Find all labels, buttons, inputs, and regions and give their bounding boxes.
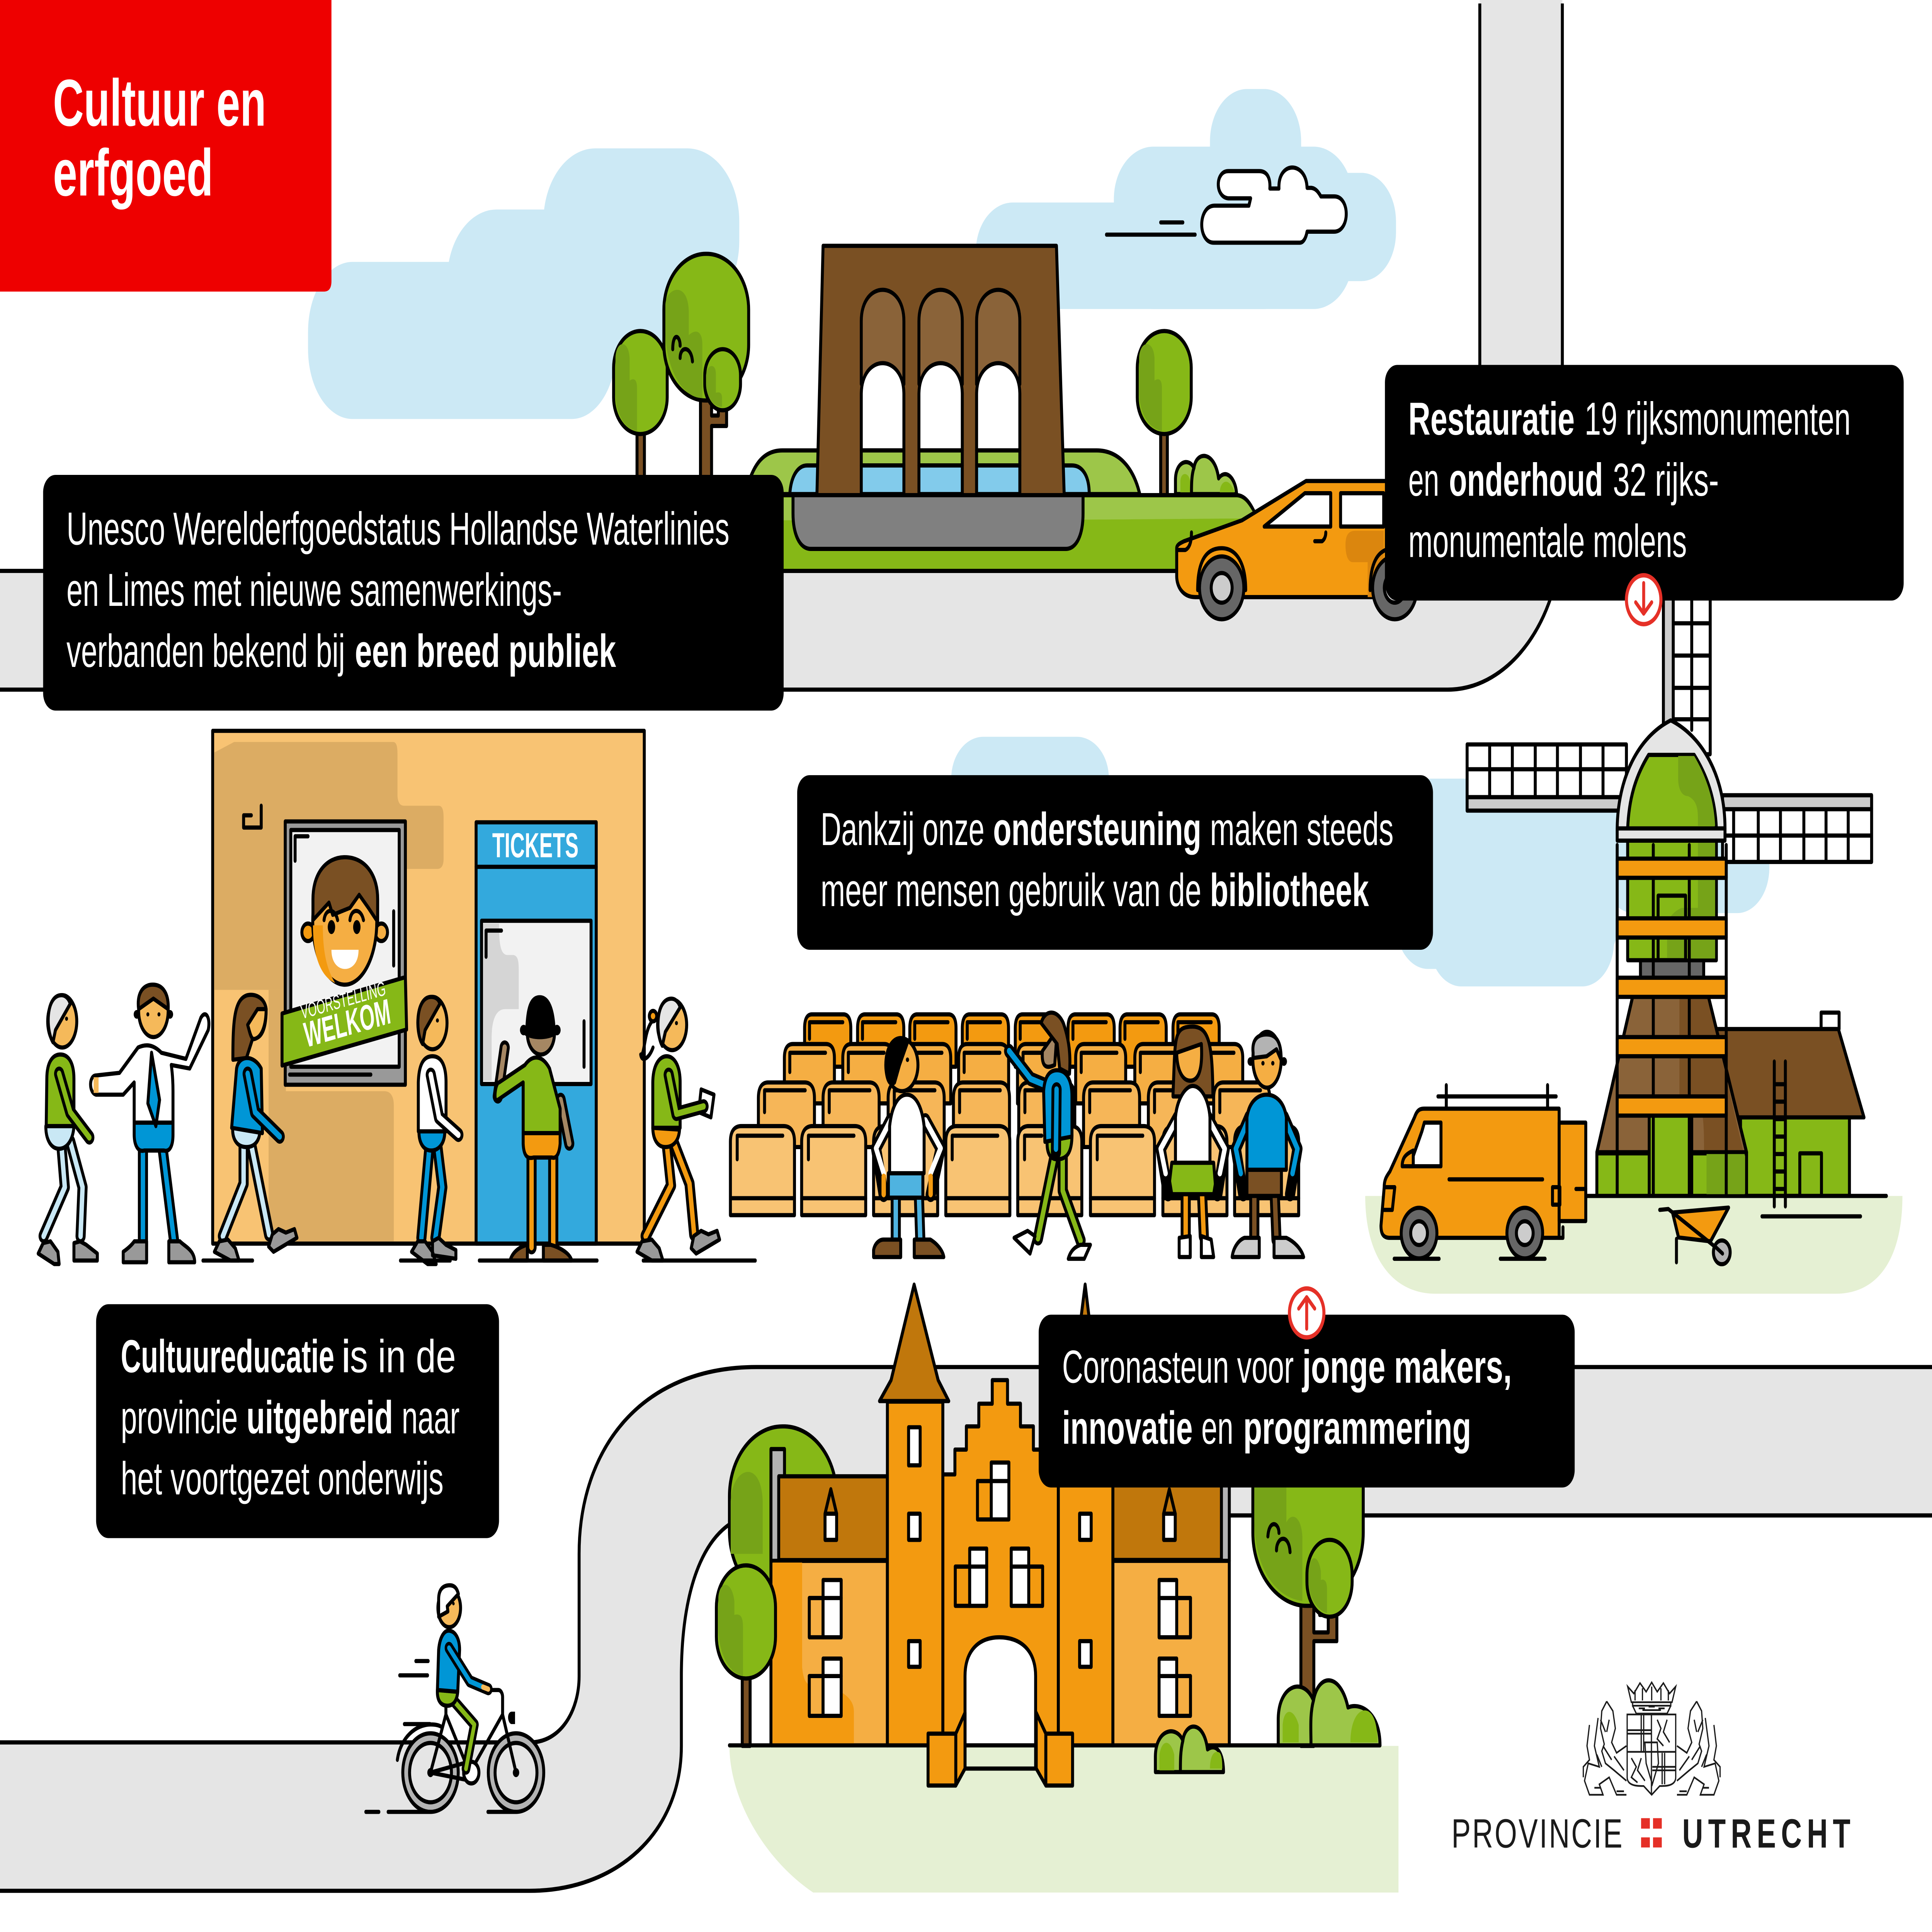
crown — [1628, 1682, 1676, 1714]
callout: Restauratie — [1385, 365, 1904, 600]
callout: Coronasteun: jonge makers, — [1302, 1341, 1512, 1393]
road outline: bottom road — [0, 1367, 1932, 1891]
callout: Unesco Werelderfgoedstatus — [43, 475, 784, 711]
trees beside the aqueduct — [614, 254, 1191, 496]
bush near road — [1175, 456, 1236, 494]
theatre seats: second row — [784, 1044, 1243, 1104]
callout: Unesco Werelderfgoedstatus: Unesco Werelderfgoedstatus Hollandse Waterlinies — [66, 503, 730, 554]
banner — [282, 977, 406, 1066]
road: bottom winding road — [0, 1367, 1932, 1891]
tower base brick — [1597, 997, 1747, 1152]
wordmark: provincie: PROVINCIE — [1451, 1811, 1622, 1856]
callout: Cultuureducatie: het voortgezet onderwijs — [121, 1452, 444, 1504]
poster: voorstelling welkom — [282, 821, 406, 1085]
foreground green bank — [739, 495, 1258, 571]
callout: Cultuureducatie: uitgebreid — [247, 1391, 393, 1443]
castle windows — [809, 1463, 1190, 1716]
person: woman with ponytail walking with paper — [637, 998, 719, 1260]
bicycle frame — [397, 1690, 516, 1781]
water — [790, 466, 1089, 494]
person: woman in blue pointing — [1009, 1013, 1090, 1259]
callout: bibliotheek: maken steeds — [1210, 803, 1394, 855]
cyclist — [437, 1585, 488, 1769]
castle ground line — [730, 1745, 1380, 1746]
person: seated woman with long hair — [1161, 1027, 1225, 1257]
green upper body — [1628, 840, 1716, 960]
central stepped gable — [943, 1380, 1058, 1745]
right sail — [1723, 795, 1872, 862]
callout: Restauratie: 32 rijks- — [1613, 454, 1719, 506]
title — [53, 66, 266, 210]
person: seated man in white shirt — [874, 1038, 944, 1257]
left wing — [771, 1449, 888, 1745]
ground: castle meadow — [730, 1746, 1398, 1893]
logo: Provincie Utrecht — [1451, 1682, 1850, 1856]
person on bicycle — [366, 1585, 544, 1812]
callout: Unesco Werelderfgoedstatus: verbanden bekend bij — [66, 625, 345, 677]
wheelbarrow — [1660, 1208, 1730, 1264]
tree behind castle left — [730, 1426, 837, 1601]
road: top road with vertical branch — [0, 0, 1562, 690]
rear green bank — [745, 451, 1140, 494]
callout: bibliotheek: bibliotheek — [1210, 864, 1369, 916]
logo red squares — [1641, 1818, 1662, 1847]
ground: windmill meadow — [1365, 1196, 1902, 1294]
ticket window — [481, 921, 591, 1084]
callout: Restauratie: 19 rijksmonumenten — [1585, 393, 1851, 444]
icon: red up arrow — [1289, 1289, 1324, 1337]
person: white-haired man in green walking — [38, 995, 97, 1264]
right lion — [1677, 1701, 1720, 1795]
upper sail — [1663, 594, 1710, 754]
person: woman in blue walking — [214, 995, 297, 1260]
title block — [0, 0, 332, 292]
castle with trees — [716, 1285, 1380, 1786]
theatre seats: third row — [759, 1082, 1270, 1147]
small outlined cloud — [1107, 168, 1346, 243]
left sail — [1467, 745, 1626, 811]
grey base — [1641, 960, 1704, 981]
callout: Restauratie: Restauratie — [1408, 393, 1575, 444]
tickets label: TICKETS — [492, 825, 578, 865]
castle archway and gate posts — [928, 1637, 1073, 1786]
clouds: sky background — [308, 89, 1769, 986]
small bush in front of castle — [1155, 1726, 1223, 1772]
callout: Restauratie: monumentale molens — [1408, 515, 1687, 567]
callout: bibliotheek — [797, 775, 1433, 950]
ticket booth — [476, 822, 596, 1243]
tree in front of castle — [716, 1565, 776, 1746]
right tower — [1058, 1285, 1113, 1745]
van: orange work van — [1381, 1085, 1586, 1259]
callout: bibliotheek: Dankzij onze — [821, 803, 985, 855]
person: seated man in blue with grey hair — [1232, 1032, 1304, 1257]
windmill with scaffolding — [1467, 594, 1886, 1216]
icon: red down arrow — [1626, 575, 1661, 624]
road outline: top road — [0, 3, 1562, 690]
callout: Cultuureducatie — [96, 1304, 499, 1538]
callout: Restauratie: en — [1408, 454, 1439, 506]
title: Cultuur en — [53, 66, 266, 140]
callout: Unesco Werelderfgoedstatus: een breed publiek — [355, 625, 616, 677]
person: man in white shirt and tie pointing — [90, 985, 209, 1262]
callout: Cultuureducatie: provincie — [121, 1391, 238, 1443]
coat of arms — [1583, 1682, 1720, 1795]
wordmark: utrecht: UTRECHT — [1682, 1811, 1850, 1856]
left tower with spire — [879, 1285, 949, 1745]
callout: Cultuureducatie: s in de — [350, 1330, 456, 1382]
mill cap — [1617, 720, 1725, 828]
shield — [1627, 1714, 1676, 1795]
theatre building wall — [213, 731, 644, 1243]
grey basin — [793, 495, 1083, 549]
right wing — [1113, 1475, 1229, 1745]
callout: bibliotheek: ondersteuning — [993, 803, 1201, 855]
farm house — [1585, 1013, 1886, 1216]
bicycle rear wheel — [403, 1733, 458, 1812]
callout: Coronasteun: en — [1201, 1402, 1233, 1454]
left lion — [1583, 1701, 1626, 1795]
callout: Coronasteun: innovatie — [1062, 1402, 1193, 1454]
theatre seats: front row — [730, 1126, 1299, 1215]
large bush right of castle — [1278, 1680, 1380, 1745]
callout: bibliotheek: meer mensen gebruik van de — [821, 864, 1201, 916]
callout: Unesco Werelderfgoedstatus: en Limes met nieuwe samenwerkings- — [66, 564, 562, 616]
callout: Coronasteun: programmering — [1243, 1402, 1471, 1454]
monument body with arches — [817, 246, 1064, 495]
tree behind castle right — [1253, 1397, 1363, 1746]
title: erfgoed — [53, 136, 213, 210]
scaffolding poles and planks — [1617, 845, 1726, 1196]
person: customer at ticket window — [495, 995, 572, 1260]
person: man in white shirt walking — [412, 997, 458, 1264]
poster face — [302, 857, 388, 985]
callout: Cultuureducatie: naar — [402, 1391, 459, 1443]
callout: Coronasteun: Coronasteun voor — [1062, 1341, 1294, 1393]
callout: Coronasteun — [1039, 1315, 1575, 1488]
speed lines — [366, 1661, 516, 1812]
theatre seats: back row — [804, 1014, 1219, 1067]
green lower level — [1597, 1153, 1747, 1196]
banner: VOORSTELLING — [299, 977, 387, 1024]
callout: Cultuureducatie: Cultuureducatie i — [121, 1330, 350, 1382]
aqueduct monument: Hollandse Waterlinies and Limes — [739, 246, 1258, 571]
bicycle front wheel — [488, 1733, 544, 1812]
banner: WELKOM — [301, 991, 393, 1055]
callout: Restauratie: onderhoud — [1449, 454, 1603, 506]
car: orange car on road — [1177, 481, 1429, 619]
ground lines: theatre square — [203, 1260, 755, 1261]
